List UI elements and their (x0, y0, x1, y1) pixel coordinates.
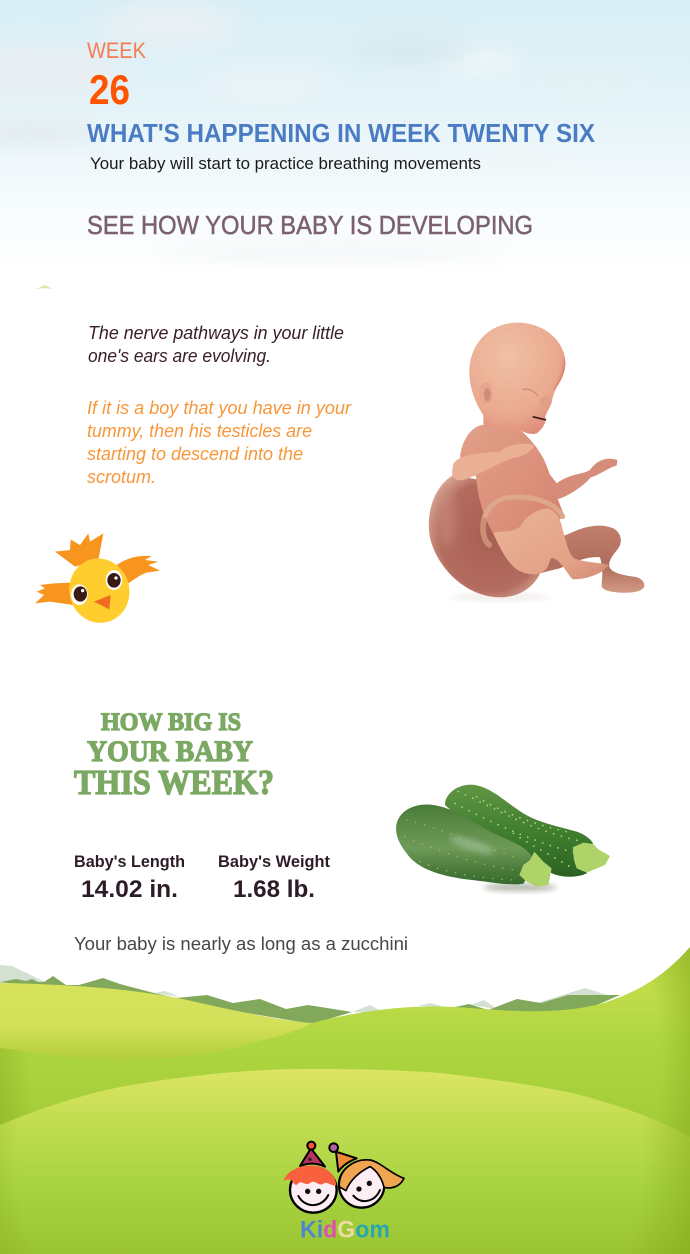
text block: nerve pathways: one's ears are evolving. (88, 346, 271, 366)
text block: testicles descending (87, 398, 352, 487)
illustration: chick mascot (35, 533, 160, 630)
illustration: zucchini (396, 785, 610, 891)
landscape: green hills and mountains (0, 940, 690, 1254)
heading: how big is your baby this week: THIS WEEK? (74, 763, 274, 802)
heading: how big is your baby this week (74, 709, 274, 802)
text block: nerve pathways: The nerve pathways in your little (88, 323, 344, 343)
text block: testicles descending: scrotum. (87, 467, 156, 487)
stat: baby's weight: Baby's Weight (218, 853, 330, 871)
wordmark: KidGom (300, 1216, 390, 1243)
text block: nerve pathways (88, 323, 344, 366)
hat right (329, 1143, 357, 1172)
sky background with clouds (0, 0, 690, 289)
caption: zucchini comparison: Your baby is nearly as long as a zucchini (74, 933, 408, 954)
heading: how big is your baby this week: HOW BIG IS (101, 709, 241, 736)
subheading: breathing movements: Your baby will start to practice breathing movements (90, 154, 481, 173)
stat: baby's length: Baby's Length (74, 853, 185, 871)
text block: testicles descending: starting to descend into the (87, 444, 303, 464)
stat: baby's length (74, 853, 185, 903)
heading: see how your baby is developing: SEE HOW YOUR BABY IS DEVELOPING (87, 212, 533, 240)
face left (284, 1166, 337, 1213)
text block: testicles descending: If it is a boy that you have in your (87, 398, 352, 418)
illustration: fetus (429, 323, 644, 600)
stat: baby's weight: 1.68 lb. (233, 876, 315, 903)
logo: KidGom (284, 1142, 404, 1243)
week number 26: 26 (89, 66, 130, 113)
label: WEEK: WEEK (87, 38, 146, 63)
hat left (300, 1142, 325, 1167)
face right (339, 1160, 404, 1208)
heading: what's happening: WHAT'S HAPPENING IN WEEK TWENTY SIX (87, 118, 596, 148)
text block: testicles descending: tummy, then his testicles are (87, 421, 312, 441)
heading: how big is your baby this week: YOUR BABY (87, 735, 253, 768)
stat: baby's length: 14.02 in. (81, 876, 178, 903)
stat: baby's weight (218, 853, 330, 903)
